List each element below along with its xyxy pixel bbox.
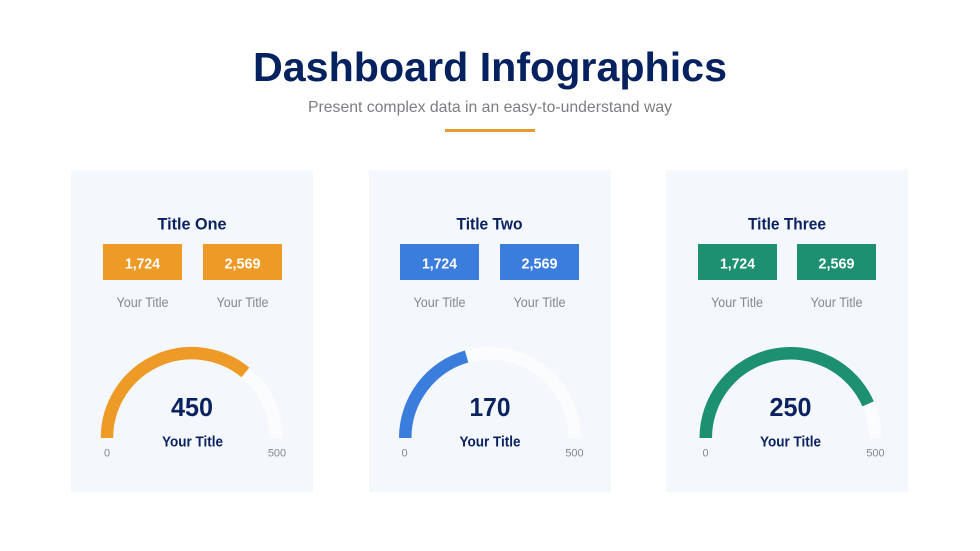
stat box: 1,724: 1,724	[720, 256, 755, 272]
stat label left: Your Title	[414, 295, 466, 310]
stat box: 1,724	[400, 244, 479, 280]
gauge min: 0	[401, 448, 408, 460]
gauge max: 500	[268, 448, 286, 460]
stat box: 2,569: 2,569	[224, 256, 260, 272]
stat label left: Your Title	[711, 295, 763, 310]
stat box: 2,569	[500, 244, 579, 280]
gauge label: Your Title	[760, 434, 821, 450]
title: Dashboard Infographics	[253, 44, 727, 90]
panel: title two	[369, 170, 611, 492]
stat box: 2,569	[203, 244, 282, 280]
stat box: 2,569: 2,569	[522, 256, 558, 272]
gauge value: 250	[770, 392, 812, 422]
panel heading: Title One	[158, 214, 226, 234]
gauge min: 0	[104, 448, 110, 460]
gauge: 170 of 500	[401, 353, 584, 460]
gauge: 450 of 500	[104, 353, 286, 460]
gauge label: Your Title	[162, 434, 223, 450]
title underline	[445, 129, 535, 132]
stat label right: Your Title	[216, 295, 268, 310]
stat label left: Your Title	[116, 295, 168, 310]
panel heading: Title Three	[748, 214, 826, 234]
panel heading: Title Two	[456, 214, 522, 234]
stat label right: Your Title	[810, 295, 862, 310]
stat box: 1,724: 1,724	[422, 256, 457, 272]
panel: title one	[71, 170, 313, 492]
header	[253, 44, 727, 132]
stat box: 2,569: 2,569	[818, 256, 854, 272]
subtitle: Present complex data in an easy-to-understand way	[308, 99, 672, 116]
stat box: 1,724	[103, 244, 182, 280]
gauge max: 500	[565, 448, 584, 460]
stat box: 2,569	[797, 244, 876, 280]
gauge: 250 of 500	[702, 353, 885, 460]
gauge label: Your Title	[460, 434, 520, 450]
stat box: 1,724: 1,724	[125, 256, 160, 272]
gauge min: 0	[702, 448, 709, 460]
gauge value: 170	[470, 392, 510, 422]
gauge value: 450	[171, 392, 213, 422]
panel: title three	[666, 170, 908, 492]
stat label right: Your Title	[514, 295, 566, 310]
stat box: 1,724	[698, 244, 777, 280]
gauge max: 500	[866, 448, 885, 460]
